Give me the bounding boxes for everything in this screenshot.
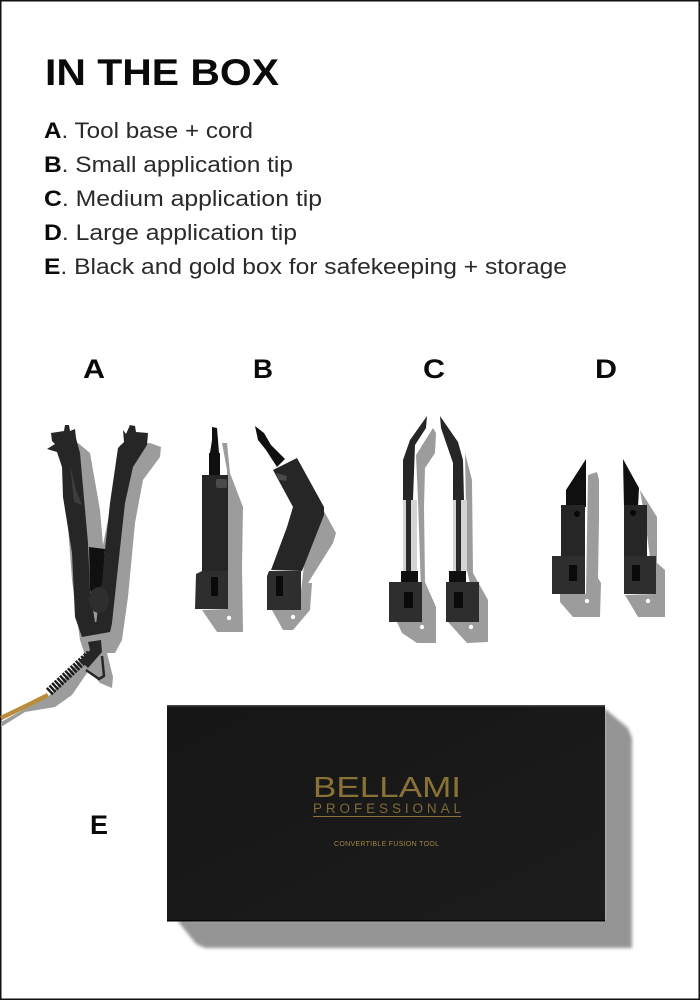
left tip clip [216, 479, 227, 488]
right tip head [440, 416, 464, 500]
shadow notch left [227, 616, 231, 620]
brand sub-name: PROFESSIONAL [313, 801, 461, 816]
label A: A [83, 354, 105, 384]
left tip neck [401, 571, 418, 583]
list item D: D. Large application tip [44, 220, 297, 245]
tool base with cord [1, 425, 161, 727]
list item C: C. Medium application tip [44, 186, 322, 211]
right tip screw [630, 510, 636, 516]
right tip rod core [456, 500, 461, 571]
right arm [96, 425, 148, 632]
left tip window [569, 565, 577, 581]
cord strain relief [49, 654, 90, 692]
right tip point [255, 426, 285, 467]
left tip head [403, 416, 427, 500]
shadow notch right [469, 625, 473, 629]
left tip window [404, 592, 413, 608]
left tip collar [552, 556, 585, 594]
black and gold box [167, 705, 632, 948]
label C: C [423, 354, 445, 384]
box shadow [177, 708, 632, 948]
brand name: BELLAMI [313, 772, 461, 804]
right tip blade [623, 459, 639, 507]
title: IN THE BOX [45, 52, 279, 93]
arm edge highlight [70, 465, 82, 505]
label B: B [253, 354, 273, 384]
left tip shadow [560, 472, 601, 617]
right tip collar [446, 582, 479, 622]
hinge button [89, 587, 109, 613]
left tip blade [566, 459, 586, 507]
shadow notch left [420, 625, 424, 629]
left tip metal rod [403, 500, 417, 571]
cord [1, 695, 48, 718]
small application tip [195, 426, 336, 632]
right tip shadow [272, 470, 336, 630]
left tip shadow [397, 428, 436, 643]
left tip body [561, 505, 585, 557]
left tip body [202, 475, 228, 572]
right tip neck [449, 571, 466, 583]
shadow notch right [291, 615, 295, 619]
right tip window [632, 565, 640, 581]
left tip collar [389, 582, 422, 622]
contents list [44, 118, 567, 279]
left tip window [211, 577, 218, 596]
list item A: A. Tool base + cord [44, 118, 253, 143]
left tip shadow [202, 443, 243, 632]
left tip rod core [406, 500, 411, 571]
left tip stem [209, 453, 220, 475]
label E: E [90, 810, 108, 840]
right tip window [276, 576, 283, 596]
list item B: B. Small application tip [44, 152, 293, 177]
right tip clip [276, 473, 287, 481]
left arm [47, 425, 112, 637]
list item E: E. Black and gold box for safekeeping + storage [44, 254, 567, 279]
right tip metal rod [453, 500, 467, 571]
left tip screw [574, 511, 580, 517]
box top edge [167, 705, 605, 706]
left tip point [210, 427, 219, 453]
hinge core [89, 547, 105, 600]
box bottom edge [167, 920, 605, 922]
cord stand loop [86, 656, 104, 679]
right tip body [271, 458, 324, 571]
right tip collar [624, 556, 656, 594]
shadow notch right [646, 599, 650, 603]
cord neck [80, 640, 102, 668]
left tip collar [195, 571, 228, 609]
product name: CONVERTIBLE FUSION TOOL [334, 841, 439, 848]
right tip shadow [448, 453, 488, 643]
large application tip [552, 459, 665, 617]
right tip collar [267, 571, 301, 610]
box lid [167, 705, 605, 921]
right tip shadow [625, 490, 665, 617]
label D: D [595, 354, 617, 384]
medium application tip [389, 416, 488, 643]
brand underline [313, 816, 461, 817]
tool shadow [1, 443, 161, 727]
right tip body [624, 505, 647, 557]
right tip window [454, 592, 463, 608]
shadow notch left [585, 599, 589, 603]
